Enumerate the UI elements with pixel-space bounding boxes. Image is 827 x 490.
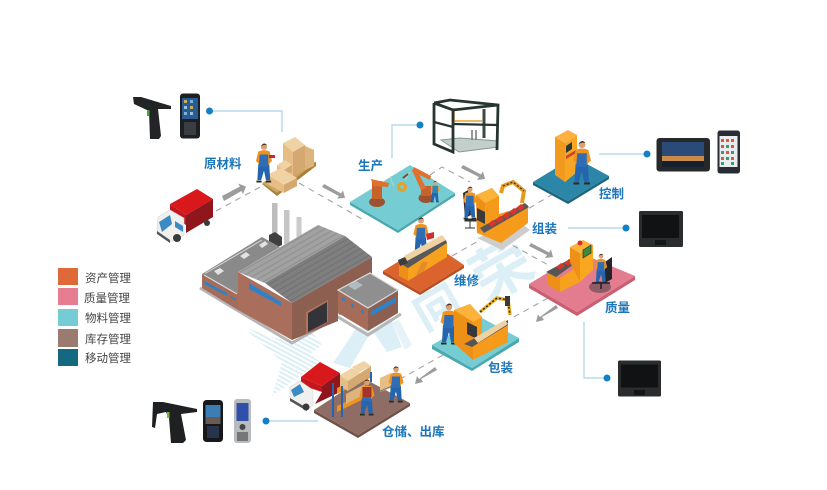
label: raw material: 原材料 bbox=[204, 156, 242, 171]
label: production: 生产 bbox=[358, 158, 383, 173]
label: assembly: 组装 bbox=[532, 221, 558, 236]
truck warehouse bbox=[290, 362, 340, 411]
device: PDA bottom bbox=[203, 400, 223, 442]
watermark: 向 bbox=[403, 271, 471, 341]
device: PDA top bbox=[180, 94, 200, 138]
legend: 物料管理 bbox=[85, 311, 131, 325]
label: maintenance: 维修 bbox=[454, 273, 480, 288]
legend: 质量管理 bbox=[84, 291, 130, 305]
device: scanner gun top bbox=[133, 97, 171, 139]
factory bbox=[200, 203, 401, 343]
label: control: 控制 bbox=[599, 186, 624, 201]
flow arrows bbox=[222, 165, 558, 384]
device: scanner gun bottom bbox=[152, 402, 197, 443]
device connector lines bbox=[206, 108, 650, 424]
label: quality: 质量 bbox=[605, 300, 630, 315]
dashed flow lines bbox=[216, 167, 553, 378]
panel: packaging bbox=[432, 296, 519, 371]
device: wrapping machine bbox=[434, 100, 498, 152]
watermark: 荣 bbox=[460, 226, 545, 314]
device: tablet bbox=[656, 138, 710, 172]
panel: production bbox=[350, 165, 455, 233]
legend: 库存管理 bbox=[85, 332, 131, 346]
legend: 移动管理 bbox=[85, 351, 131, 365]
label: packaging: 包装 bbox=[488, 360, 514, 375]
panel: quality bbox=[529, 240, 635, 316]
legend: 资产管理 bbox=[85, 271, 131, 285]
device: phone bbox=[718, 130, 740, 174]
pallet and worker: raw material bbox=[256, 137, 316, 196]
label: warehouse outbound: 仓储、出库 bbox=[382, 424, 445, 439]
device: control panel bbox=[639, 211, 683, 247]
device: handheld terminal bbox=[234, 399, 251, 443]
panel: assembly bbox=[463, 182, 530, 250]
panel: maintenance bbox=[383, 218, 464, 295]
device: control panel lower bbox=[618, 360, 661, 396]
panel: control bbox=[533, 130, 609, 204]
panel: warehouse bbox=[314, 361, 410, 438]
legend bbox=[58, 268, 131, 366]
truck top bbox=[157, 189, 213, 243]
watermark bbox=[243, 226, 545, 396]
